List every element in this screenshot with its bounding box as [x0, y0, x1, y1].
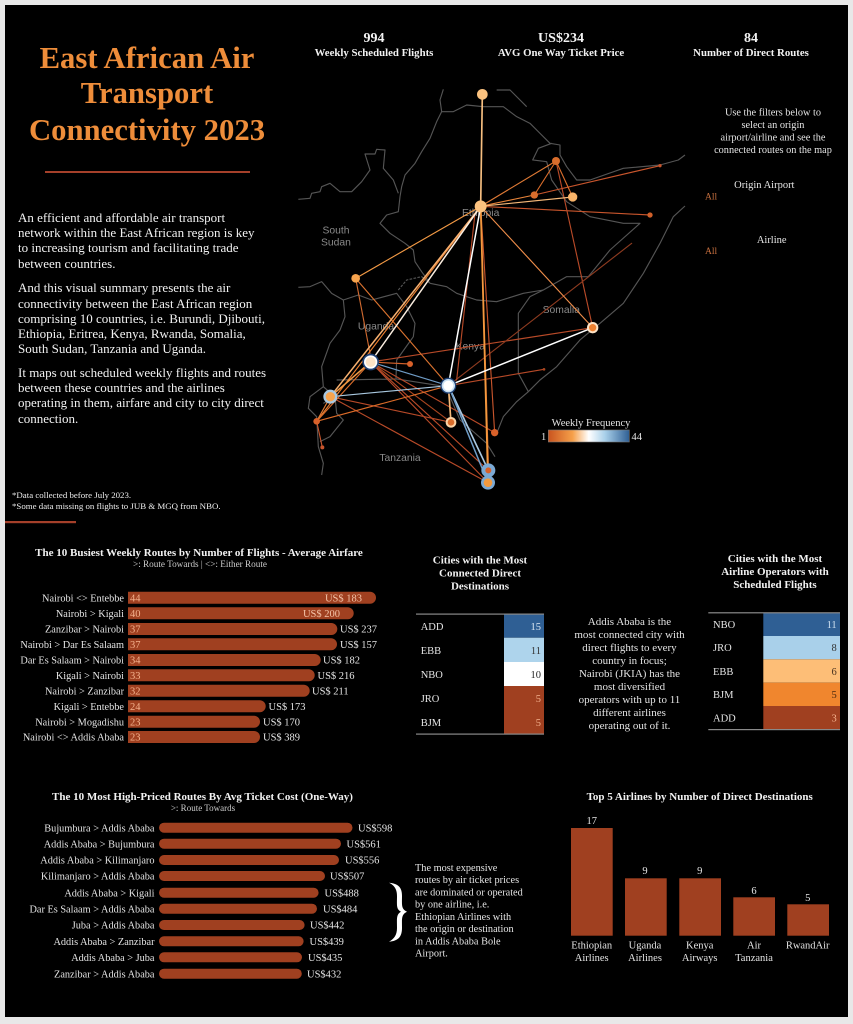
bar chart: top 5 airlines: Airlines [575, 953, 609, 964]
heading: busiest routes: >: Route Towards | <>: Either Route [133, 559, 267, 569]
text block: introduction: And this visual summary presents the air [18, 280, 231, 295]
heading: connected cities [433, 554, 528, 592]
map: country labels: South [322, 226, 350, 237]
callout: most connected city: operators with up to 11 [579, 694, 680, 706]
bar chart: busiest routes: US$ 237 [340, 625, 377, 636]
table: airline operators: 5 [831, 690, 837, 701]
callout: expensive routes: in Addis Ababa Bole [415, 936, 501, 947]
route map [298, 89, 685, 490]
text block: introduction: Ethiopia, Eritrea, Kenya, Rwanda, Somalia, [18, 326, 246, 341]
bar chart: busiest routes: Kigali > Entebbe [54, 702, 124, 713]
bar chart: busiest routes: 33 [130, 671, 140, 682]
table: connected destinations: 15 [530, 622, 541, 633]
panel: high-priced routes [29, 791, 392, 980]
bar chart: top 5 airlines: Air [747, 940, 762, 952]
bar chart: high-priced routes: Bujumbura > Addis Ababa [44, 823, 155, 834]
bar chart: busiest routes: 23 [130, 718, 140, 728]
filter: airline [705, 235, 787, 257]
KPI: ticket price: US$234 [538, 31, 584, 46]
panel: busiest weekly routes [20, 547, 377, 744]
table: connected destinations [416, 614, 544, 735]
heading: top 5 airlines: Top 5 Airlines by Number of Direct Destinations [587, 791, 814, 803]
table: airline operators: ADD [713, 714, 736, 724]
bar chart: top 5 airlines: RwandAir [786, 940, 830, 952]
filter instructions: select an origin [742, 120, 804, 131]
bar chart: top 5 airlines: Ethiopian [571, 940, 613, 952]
text block: introduction: It maps out scheduled weekly flights and routes [18, 365, 266, 380]
KPI: weekly flights: Weekly Scheduled Flights [315, 47, 433, 59]
heading: connected cities: Destinations [451, 580, 510, 592]
bar chart: top 5 airlines: 6 [751, 886, 757, 897]
bar chart: busiest routes: Kigali > Nairobi [56, 671, 124, 682]
bar chart: high-priced routes: US$598 [358, 823, 392, 834]
table: connected destinations: 5 [536, 694, 541, 705]
bar chart: busiest routes: US$ 170 [263, 718, 300, 728]
heading: airline operators: Airline Operators with [721, 566, 829, 578]
data notes [12, 490, 221, 511]
bar chart: top 5 airlines: Uganda [629, 940, 662, 952]
bar chart: high-priced routes: US$442 [310, 921, 344, 932]
map: country labels: Sudan [321, 238, 351, 249]
bar chart: high-priced routes: Zanzibar > Addis Ababa [54, 969, 155, 980]
bar chart: high-priced routes: Dar Es Salaam > Addis Ababa [29, 904, 155, 915]
KPI: ticket price [498, 31, 624, 59]
bar chart: top 5 airlines: Kenya [686, 940, 714, 952]
bar chart: busiest routes: 44 [130, 594, 141, 604]
table: connected destinations: JRO [421, 694, 440, 705]
table: airline operators: EBB [713, 667, 733, 678]
callout: expensive routes [415, 863, 524, 960]
text block: introduction: network within the East African region is key [18, 225, 255, 240]
callout: most connected city: most connected city with [574, 629, 685, 641]
bar chart: busiest routes: 23 [130, 733, 140, 744]
panel: most connected cities [416, 554, 544, 735]
bar chart: busiest routes: US$ 211 [312, 686, 349, 698]
table: connected destinations: 11 [531, 646, 541, 657]
KPI: weekly flights [315, 31, 433, 59]
callout: most connected city: Nairobi (JKIA) has the [579, 668, 680, 680]
callout: most connected city: operating out of it. [589, 720, 671, 732]
bar chart: busiest routes: 32 [130, 686, 140, 698]
bar chart: high-priced routes: US$435 [308, 953, 342, 964]
table: connected destinations: 10 [530, 670, 541, 681]
table: airline operators: 8 [831, 643, 837, 654]
bar chart: high-priced routes: Addis Ababa > Zanzibar [53, 937, 155, 948]
bar chart: busiest routes: Nairobi > Mogadishu [35, 718, 124, 728]
callout: expensive routes: are dominated or operated [415, 887, 524, 898]
bar chart: high-priced routes: US$488 [324, 888, 359, 899]
legend: weekly frequency: 1 [541, 432, 546, 443]
bar chart: busiest routes: 24 [130, 702, 141, 713]
bar chart: high-priced routes: Addis Ababa > Kigali [64, 888, 155, 899]
table: connected destinations: BJM [421, 718, 442, 729]
heading: airline operators: Cities with the Most [728, 553, 823, 565]
bar chart: high-priced routes [29, 823, 392, 980]
bar chart: busiest routes: Nairobi <> Addis Ababa [23, 733, 124, 744]
bar chart: top 5 airlines: 9 [697, 866, 702, 877]
text block: introduction [18, 210, 266, 426]
text block: introduction: operating in them, airfare and city to city direct [18, 395, 264, 410]
map: country labels: Uganda [358, 321, 394, 332]
table: connected destinations: ADD [421, 622, 444, 633]
KPI: weekly flights: 994 [364, 31, 384, 46]
bar chart: high-priced routes: Addis Ababa > Juba [71, 953, 155, 964]
bar chart: busiest routes: Zanzibar > Nairobi [45, 625, 124, 636]
callout: most connected city: Addis Ababa is the [588, 616, 671, 628]
bar chart: high-priced routes: US$439 [310, 937, 344, 948]
filter instructions: Use the filters below to [725, 108, 821, 118]
table: airline operators: 3 [831, 714, 837, 724]
bar chart: top 5 airlines: Airways [682, 953, 717, 964]
heading: airline operators: Scheduled Flights [733, 579, 817, 591]
table: airline operators: 11 [827, 620, 837, 631]
bar chart: busiest routes: US$ 182 [323, 656, 360, 667]
heading: busiest routes: The 10 Busiest Weekly Routes by Number of Flights - Average Airfare [35, 547, 363, 559]
bar chart: busiest routes: Nairobi <> Entebbe [42, 594, 124, 604]
panel: airline operators by city [708, 553, 840, 730]
callout: most connected city: country in focus; [592, 655, 667, 667]
bar chart: high-priced routes: US$484 [323, 904, 358, 915]
bar chart: busiest routes: 34 [130, 656, 141, 667]
callout: most connected city [574, 616, 685, 732]
legend: weekly frequency: Weekly Frequency [552, 418, 631, 429]
filter instructions [714, 108, 832, 156]
text block: introduction: connectivity between the East African region [18, 296, 253, 311]
text block: introduction: comprising 10 countries, i.e. Burundi, Djibouti, [18, 311, 265, 326]
KPI: direct routes: 84 [744, 31, 758, 46]
heading: connected cities: Connected Direct [439, 568, 521, 580]
legend: weekly frequency: 44 [632, 432, 643, 443]
map: airport nodes [313, 89, 662, 490]
bar chart: high-priced routes: Addis Ababa > Kilimanjaro [40, 856, 154, 867]
heading: high-priced routes: The 10 Most High-Priced Routes By Avg Ticket Cost (One-Way) [52, 791, 353, 803]
bar chart: busiest routes: Nairobi > Dar Es Salaam [20, 640, 124, 651]
bar chart: top 5 airlines: 9 [642, 866, 648, 877]
legend: weekly frequency [541, 418, 643, 443]
bar chart: high-priced routes: US$432 [307, 969, 341, 980]
text block: introduction: to increasing tourism and facilitating trade [18, 240, 239, 255]
callout: expensive routes: routes by air ticket prices [415, 875, 519, 886]
heading: airline operators [721, 553, 829, 591]
filter: origin airport: All [705, 192, 718, 202]
text block: introduction: between these countries and the airlines [18, 380, 225, 395]
filter: origin airport: Origin Airport [734, 180, 795, 191]
map: country labels: Kenya [456, 341, 485, 352]
filter instructions: airport/airline and see the [721, 132, 826, 144]
bar chart: busiest routes: US$ 183 [325, 594, 362, 604]
filter instructions: connected routes on the map [714, 145, 832, 156]
bar chart: high-priced routes: Addis Ababa > Bujumbura [44, 839, 155, 850]
KPI: direct routes [693, 31, 809, 59]
map: country labels: Somalia [543, 305, 580, 316]
heading: busiest routes [35, 547, 363, 569]
table: airline operators: 6 [831, 667, 837, 678]
callout: expensive routes: Airport. [415, 948, 448, 960]
title: Connectivity 2023 [29, 113, 265, 147]
data notes: *Some data missing on flights to JUB & MGQ from NBO. [12, 501, 221, 511]
callout: expensive routes: by one airline, i.e. [415, 900, 489, 910]
bar chart: busiest routes: 37 [130, 625, 140, 636]
map: flight routes [317, 94, 660, 483]
bar chart: busiest routes: US$ 216 [318, 671, 355, 682]
bar chart: high-priced routes: US$556 [345, 856, 379, 867]
bar chart: top 5 airlines: 17 [586, 816, 597, 827]
filter: airline: All [705, 247, 718, 257]
map: country labels: Ethiopia [462, 208, 500, 219]
bar chart: busiest routes: 37 [130, 640, 140, 651]
bar chart: busiest routes: Dar Es Salaam > Nairobi [20, 656, 124, 667]
bar chart: high-priced routes: US$507 [330, 872, 364, 883]
bar chart: top 5 airlines [571, 816, 830, 964]
table: connected destinations: EBB [421, 646, 441, 657]
bar chart: busiest routes: US$ 389 [263, 733, 300, 744]
callout: most connected city: direct flights to every [582, 642, 677, 654]
bar chart: busiest routes [20, 592, 377, 744]
bar chart: high-priced routes: US$561 [346, 839, 381, 850]
bar chart: busiest routes: Nairobi > Kigali [56, 609, 124, 620]
heading: connected cities: Cities with the Most [433, 554, 528, 566]
table: airline operators: NBO [713, 620, 736, 631]
KPI: ticket price: AVG One Way Ticket Price [498, 47, 624, 59]
map: country borders [298, 89, 685, 475]
callout: most connected city: different airlines [593, 707, 666, 719]
table: airline operators: JRO [713, 643, 732, 654]
bar chart: high-priced routes: Kilimanjaro > Addis Ababa [41, 872, 155, 883]
bar chart: top 5 airlines: 5 [805, 893, 810, 904]
text block: introduction: South Sudan, Tanzania and Uganda. [18, 341, 206, 356]
bar chart: busiest routes: US$ 173 [268, 702, 306, 713]
bar chart: busiest routes: US$ 157 [340, 640, 377, 651]
bar chart: busiest routes: Nairobi > Zanzibar [45, 686, 125, 698]
panel: top 5 airlines [571, 791, 830, 964]
map: country labels: Tanzania [379, 453, 421, 464]
title [29, 41, 265, 147]
heading: high-priced routes: >: Route Towards [171, 803, 236, 813]
callout: most connected city: most diversified [594, 681, 666, 693]
table: connected destinations: NBO [421, 670, 443, 681]
callout: expensive routes: the origin or destination [415, 924, 514, 935]
text block: introduction: connection. [18, 411, 78, 426]
bar chart: busiest routes: US$ 200 [303, 609, 340, 620]
heading: high-priced routes [52, 791, 353, 813]
bar chart: top 5 airlines: Tanzania [735, 953, 773, 964]
table: airline operators [708, 612, 840, 730]
icon: curly brace [389, 883, 407, 942]
table: airline operators: BJM [713, 690, 734, 701]
text block: introduction: between countries. [18, 256, 115, 271]
filter: origin airport [705, 180, 795, 202]
bar chart: high-priced routes: Juba > Addis Ababa [72, 921, 155, 932]
callout: expensive routes: The most expensive [415, 863, 498, 874]
data notes: *Data collected before July 2023. [12, 490, 131, 500]
KPI: direct routes: Number of Direct Routes [693, 47, 809, 59]
bar chart: busiest routes: 40 [130, 609, 140, 620]
table: connected destinations: 5 [536, 718, 541, 729]
text block: introduction: An efficient and affordable air transport [18, 210, 225, 225]
title: East African Air [40, 41, 254, 75]
bar chart: top 5 airlines: Airlines [628, 953, 662, 964]
title: Transport [81, 76, 214, 110]
map: country labels [321, 208, 580, 464]
filter: airline: Airline [757, 235, 787, 246]
callout: expensive routes: Ethiopian Airlines with [415, 912, 512, 923]
